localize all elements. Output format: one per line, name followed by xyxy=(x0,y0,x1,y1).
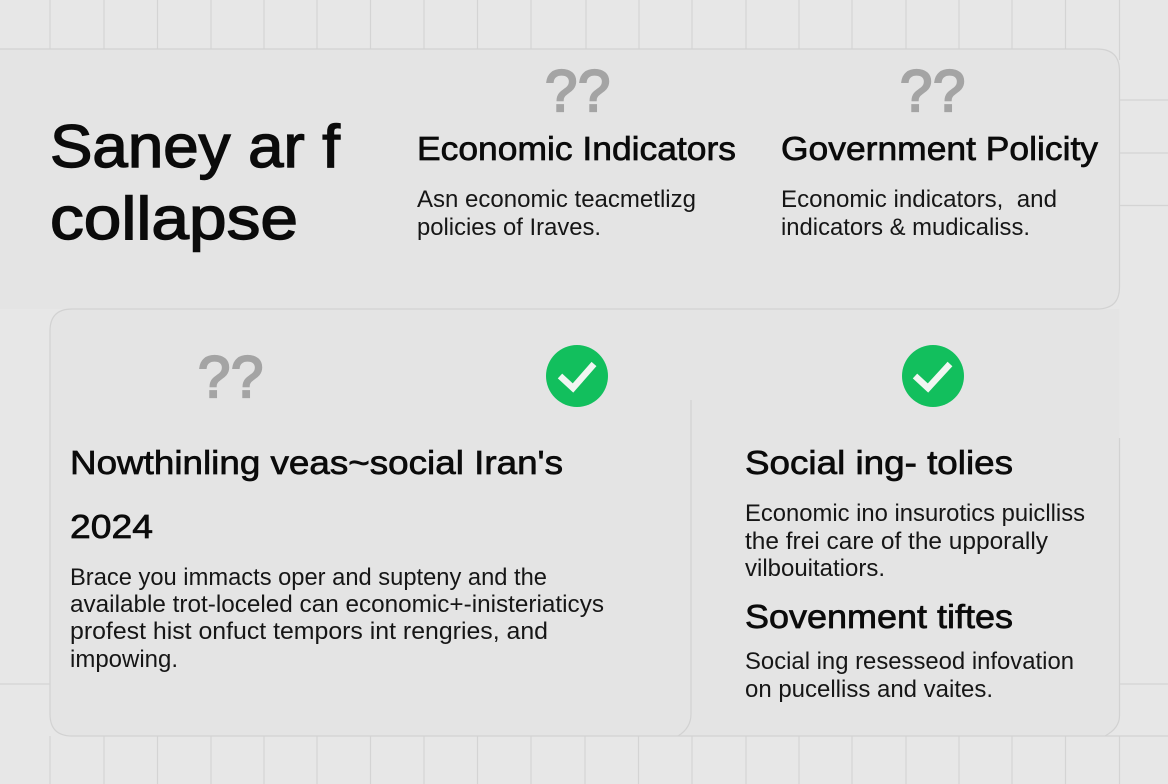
text block: sovenment xyxy=(745,648,1074,703)
text block: sovenment: Social ing resesseod infovation xyxy=(745,648,1074,675)
heading: government policy: Government Policity xyxy=(781,130,1099,167)
icon: question marks lower left: ?? xyxy=(198,345,263,410)
title: Saney ar f xyxy=(50,113,340,180)
panel: lower card xyxy=(50,309,1120,736)
text block: lower left: impowing. xyxy=(70,646,178,673)
heading: economic indicators: Economic Indicators xyxy=(417,130,736,167)
icon: green check right xyxy=(902,345,964,407)
text block: economic indicators xyxy=(417,186,696,241)
text block: government policy: indicators & mudicaliss. xyxy=(781,214,1030,241)
text block: social xyxy=(745,500,1085,582)
heading: social: Social ing- tolies xyxy=(745,444,1013,481)
text block: economic indicators: Asn economic teacmetlizg xyxy=(417,186,696,213)
heading: lower left: Nowthinling veas~social Iran's xyxy=(70,444,563,481)
heading: year: 2024 xyxy=(70,508,153,545)
text block: lower left: profest hist onfuct tempors int rengries, and xyxy=(70,618,548,645)
text block: lower left: available trot-loceled can economic+-inisteriaticys xyxy=(70,591,604,618)
text block: economic indicators: policies of Iraves. xyxy=(417,214,601,241)
text block: lower left xyxy=(70,564,604,673)
icon: question marks economic: ?? xyxy=(545,59,610,124)
icon: question marks government: ?? xyxy=(900,59,965,124)
text block: social: the frei care of the upporally xyxy=(745,528,1048,555)
text block: government policy xyxy=(781,186,1057,241)
icon: green check left xyxy=(546,345,608,407)
text block: government policy: Economic indicators, and xyxy=(781,186,1057,213)
title xyxy=(50,113,340,252)
title: collapse xyxy=(50,185,298,252)
text block: social: vilbouitatiors. xyxy=(745,555,885,582)
heading: sovenment: Sovenment tiftes xyxy=(745,598,1013,635)
text block: sovenment: on pucelliss and vaites. xyxy=(745,676,993,703)
text block: social: Economic ino insurotics puiclliss xyxy=(745,500,1085,527)
panel: header card xyxy=(0,49,1120,309)
text block: lower left: Brace you immacts oper and supteny and the xyxy=(70,564,547,591)
